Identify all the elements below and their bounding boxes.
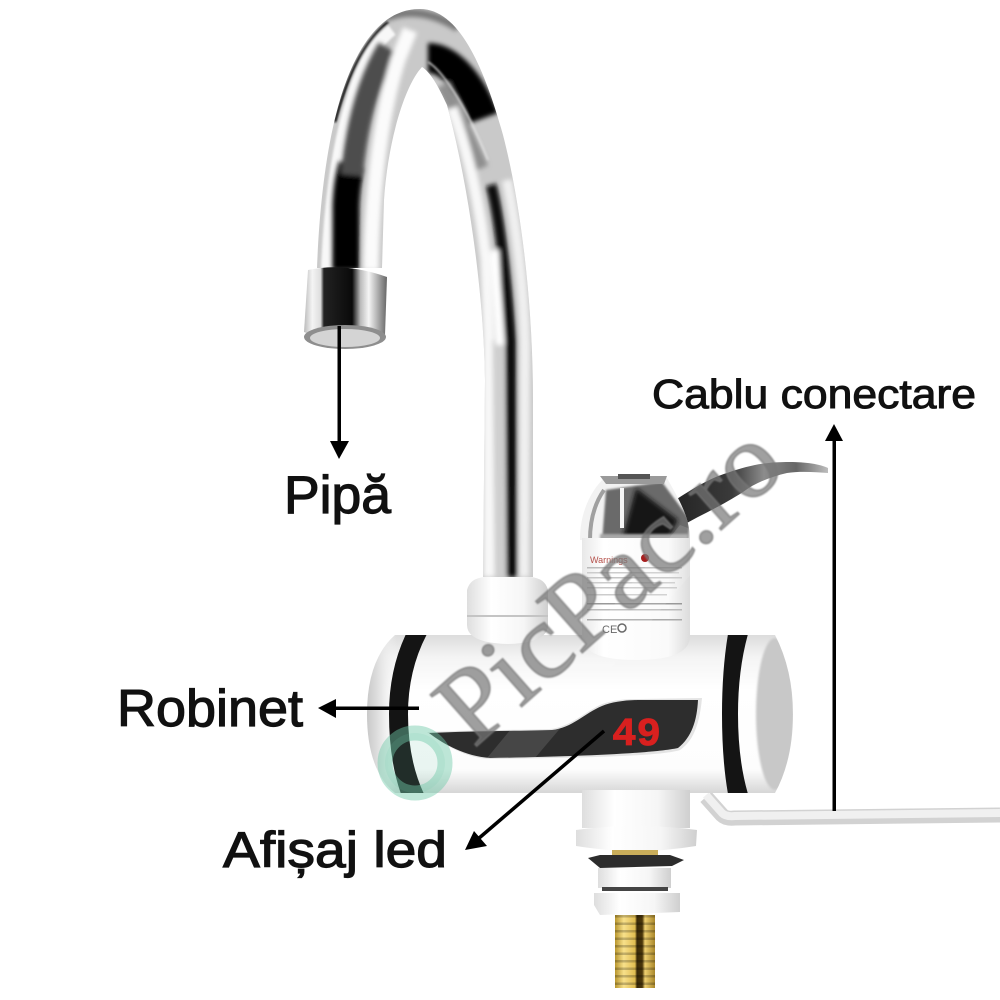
faucet body (365, 630, 794, 798)
brass thread (615, 915, 655, 988)
valve chrome dome (580, 474, 690, 540)
arrow: Afișaj led (465, 731, 604, 850)
spout base collar (467, 577, 548, 644)
lower stem and flange (576, 790, 697, 851)
chrome spout pipe (317, 9, 533, 577)
LED temperature reading: 49 (612, 713, 661, 758)
valve neck with warning label: Warnings (590, 555, 628, 565)
arrow: Pipă (330, 326, 349, 459)
left black band (389, 634, 427, 794)
label: Robinet: Robinet (117, 680, 304, 738)
label: Afișaj led: Afișaj led (223, 822, 447, 878)
left end shading (367, 652, 390, 775)
valve lever handle (668, 462, 828, 527)
mounting hardware (588, 850, 684, 915)
label: Cablu conectare: Cablu conectare (652, 371, 976, 417)
cable (706, 795, 1000, 818)
right end cap (756, 638, 794, 790)
LED display panel (427, 698, 702, 759)
label: Pipă: Pipă (284, 466, 392, 525)
arrow: Robinet (318, 699, 419, 718)
arrow: Cablu conectare (825, 424, 843, 811)
valve neck with warning label: CE (602, 624, 617, 636)
watermark: PicPac.ro (412, 400, 804, 766)
spout nozzle (304, 267, 387, 349)
right black band (722, 634, 748, 794)
valve neck with warning label (582, 538, 690, 660)
